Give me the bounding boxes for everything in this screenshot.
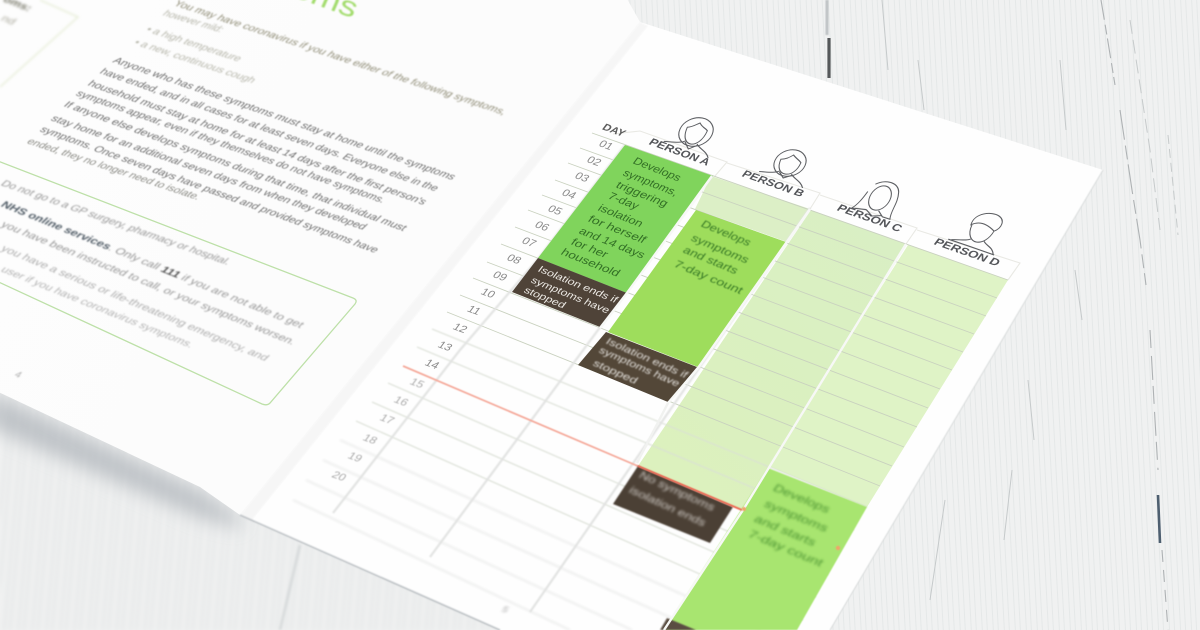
- chart: isolation calendar table: [293, 113, 1020, 630]
- day labels: 02: [584, 155, 603, 169]
- person B brown block: [578, 332, 697, 402]
- text block: symptoms intro: however mild:: [160, 9, 226, 34]
- person A green block: [538, 145, 713, 293]
- text: person A block: isolation: [595, 203, 645, 230]
- text: person D block: and starts: [751, 513, 819, 549]
- text: person D block: Develops: [770, 482, 833, 515]
- light green fill: person C: [638, 210, 905, 511]
- day labels: 19: [345, 451, 364, 465]
- text: person A block: [558, 156, 683, 279]
- callout: green outlined NHS box: you have been instructed to call, or your symptoms worsen.: [0, 220, 298, 347]
- right page of the booklet: [240, 22, 1103, 630]
- text block: isolation guidance paragraph: [24, 56, 459, 255]
- text: person B brown note: Isolation ends if: [603, 337, 690, 381]
- text: person A block: household: [558, 247, 622, 279]
- text: person A brown note: Isolation ends if: [535, 265, 620, 305]
- text: person A block: for her: [568, 237, 610, 260]
- text block: symptoms intro: You may have coronavirus if you have either of the following symptoms,: [171, 0, 509, 117]
- text: person A block: for herself: [585, 214, 649, 246]
- person C brown block: [613, 466, 733, 543]
- day labels: 14: [422, 358, 441, 372]
- text: person A block: triggering: [613, 180, 670, 209]
- icon: person A: [660, 113, 724, 158]
- day labels: 03: [572, 171, 591, 185]
- day labels: 17: [377, 413, 396, 427]
- text: person A brown note: stopped: [521, 286, 568, 311]
- text: person B brown note: [590, 337, 690, 389]
- column headers outlines: [613, 131, 1020, 280]
- day labels: 04: [559, 188, 578, 202]
- day labels: 18: [360, 433, 379, 447]
- text: person C brown note: isolation ends: [626, 485, 708, 529]
- red line: 14-day household isolation ends: [403, 366, 640, 467]
- text: person D block: symptoms: [761, 498, 831, 534]
- text block: symptoms intro: • a new, continuous cough: [131, 38, 258, 85]
- text block: isolation guidance paragraph: symptoms. Once seven days have passed and provided symptoms have: [37, 125, 381, 255]
- red line over brown: [638, 466, 742, 510]
- text: person D block: 7-day count: [745, 528, 827, 569]
- light green fill: person B: [695, 176, 810, 242]
- day labels: 08: [504, 253, 523, 267]
- icon: person D: [945, 208, 1011, 255]
- page edge: [830, 170, 1103, 630]
- page number left: 4: [13, 370, 24, 380]
- person D brown block: [660, 618, 696, 630]
- text: person B brown note: stopped: [590, 359, 640, 386]
- day labels: 10: [478, 287, 497, 301]
- text block: top-left box fragment: [0, 0, 78, 87]
- person headings: PERSON C: [834, 203, 904, 234]
- day labels: 12: [450, 322, 469, 336]
- text: person A block: symptoms,: [620, 168, 680, 199]
- day labels: 01: [596, 139, 615, 153]
- white column gaps: [600, 176, 906, 630]
- person D green block: [664, 468, 867, 630]
- text: person D block: [745, 482, 833, 569]
- text block: isolation guidance paragraph: stay home for an additional seven days from when they developed: [48, 114, 369, 232]
- page number right: 5: [500, 605, 511, 615]
- text: person A block: 7-day: [605, 191, 641, 212]
- orange ticks: [742, 507, 840, 550]
- day grid rows upper: [447, 133, 1008, 486]
- day labels: 06: [532, 220, 551, 234]
- day labels: 20: [329, 470, 348, 484]
- text: person C brown note: No symptoms: [636, 470, 717, 513]
- day labels: 07: [519, 236, 538, 250]
- text: person B block: and starts: [680, 245, 740, 277]
- callout: green outlined NHS box: NHS online services. Only call 111 if you are not able to get: [0, 200, 307, 330]
- icon: person B: [756, 146, 818, 188]
- text block: isolation guidance paragraph: ended, they no longer need to isolate.: [24, 137, 203, 202]
- text block: isolation guidance paragraph: Anyone who has these symptoms must stay at home until the symptoms: [110, 56, 459, 182]
- text block: symptoms intro: • a high temperature: [143, 25, 244, 64]
- text: person B block: [671, 219, 753, 297]
- callout: green outlined NHS box: [0, 158, 356, 405]
- light green fill: person D: [768, 245, 1008, 507]
- day labels: DAY: [600, 122, 629, 139]
- text: person A block: and 14 days: [576, 226, 647, 261]
- day labels: 16: [391, 395, 410, 409]
- text block: isolation guidance paragraph: have ended, and in all cases for at least seven days. Everyone else in the: [97, 67, 441, 193]
- day labels: 09: [490, 270, 509, 284]
- person A brown block: [512, 258, 627, 327]
- text: person A brown note: symptoms have: [528, 276, 612, 316]
- text: person B block: 7-day count: [671, 259, 746, 297]
- icon: person C: [850, 178, 905, 219]
- shadow under booklet: [0, 392, 240, 528]
- callout: green outlined NHS box: Do not go to a GP surgery, pharmacy or hospital.: [0, 179, 233, 267]
- day labels: 11: [465, 304, 483, 317]
- day grid rows lower: [356, 329, 867, 620]
- text block: isolation guidance paragraph: symptoms appear, even if they themselves do not have symptoms.: [73, 89, 388, 205]
- left page of the booklet: [0, 0, 640, 515]
- day labels: 05: [545, 204, 564, 218]
- person headings: PERSON A: [646, 137, 712, 168]
- fold shading: [240, 22, 648, 520]
- text: person A brown note: [521, 265, 620, 316]
- day labels: 13: [435, 340, 454, 354]
- callout: green outlined NHS box: user if you have coronavirus symptoms.: [0, 265, 196, 350]
- day grid rows bottom: [293, 440, 761, 630]
- day labels: 15: [407, 377, 426, 391]
- column dividers in white area: [333, 145, 810, 612]
- person headings: [646, 137, 1002, 269]
- text: person B brown note: symptoms have: [596, 346, 682, 389]
- person headings: PERSON B: [739, 169, 806, 199]
- text: person C brown note: [626, 470, 717, 529]
- person B green block: [608, 210, 786, 367]
- text: person B block: symptoms: [688, 233, 751, 266]
- person headings: PERSON D: [931, 237, 1002, 269]
- text: person A block: Develops: [630, 156, 683, 184]
- day labels: [329, 122, 629, 484]
- text: person B block: Develops: [698, 219, 753, 249]
- text block: isolation guidance paragraph: If anyone else develops symptoms during that time, that individual must: [61, 100, 410, 233]
- callout: green outlined NHS box: you have a serious or life-threatening emergency, and: [0, 244, 271, 363]
- text block: isolation guidance paragraph: household must stay at home for at least 14 days after the first person's: [85, 79, 430, 207]
